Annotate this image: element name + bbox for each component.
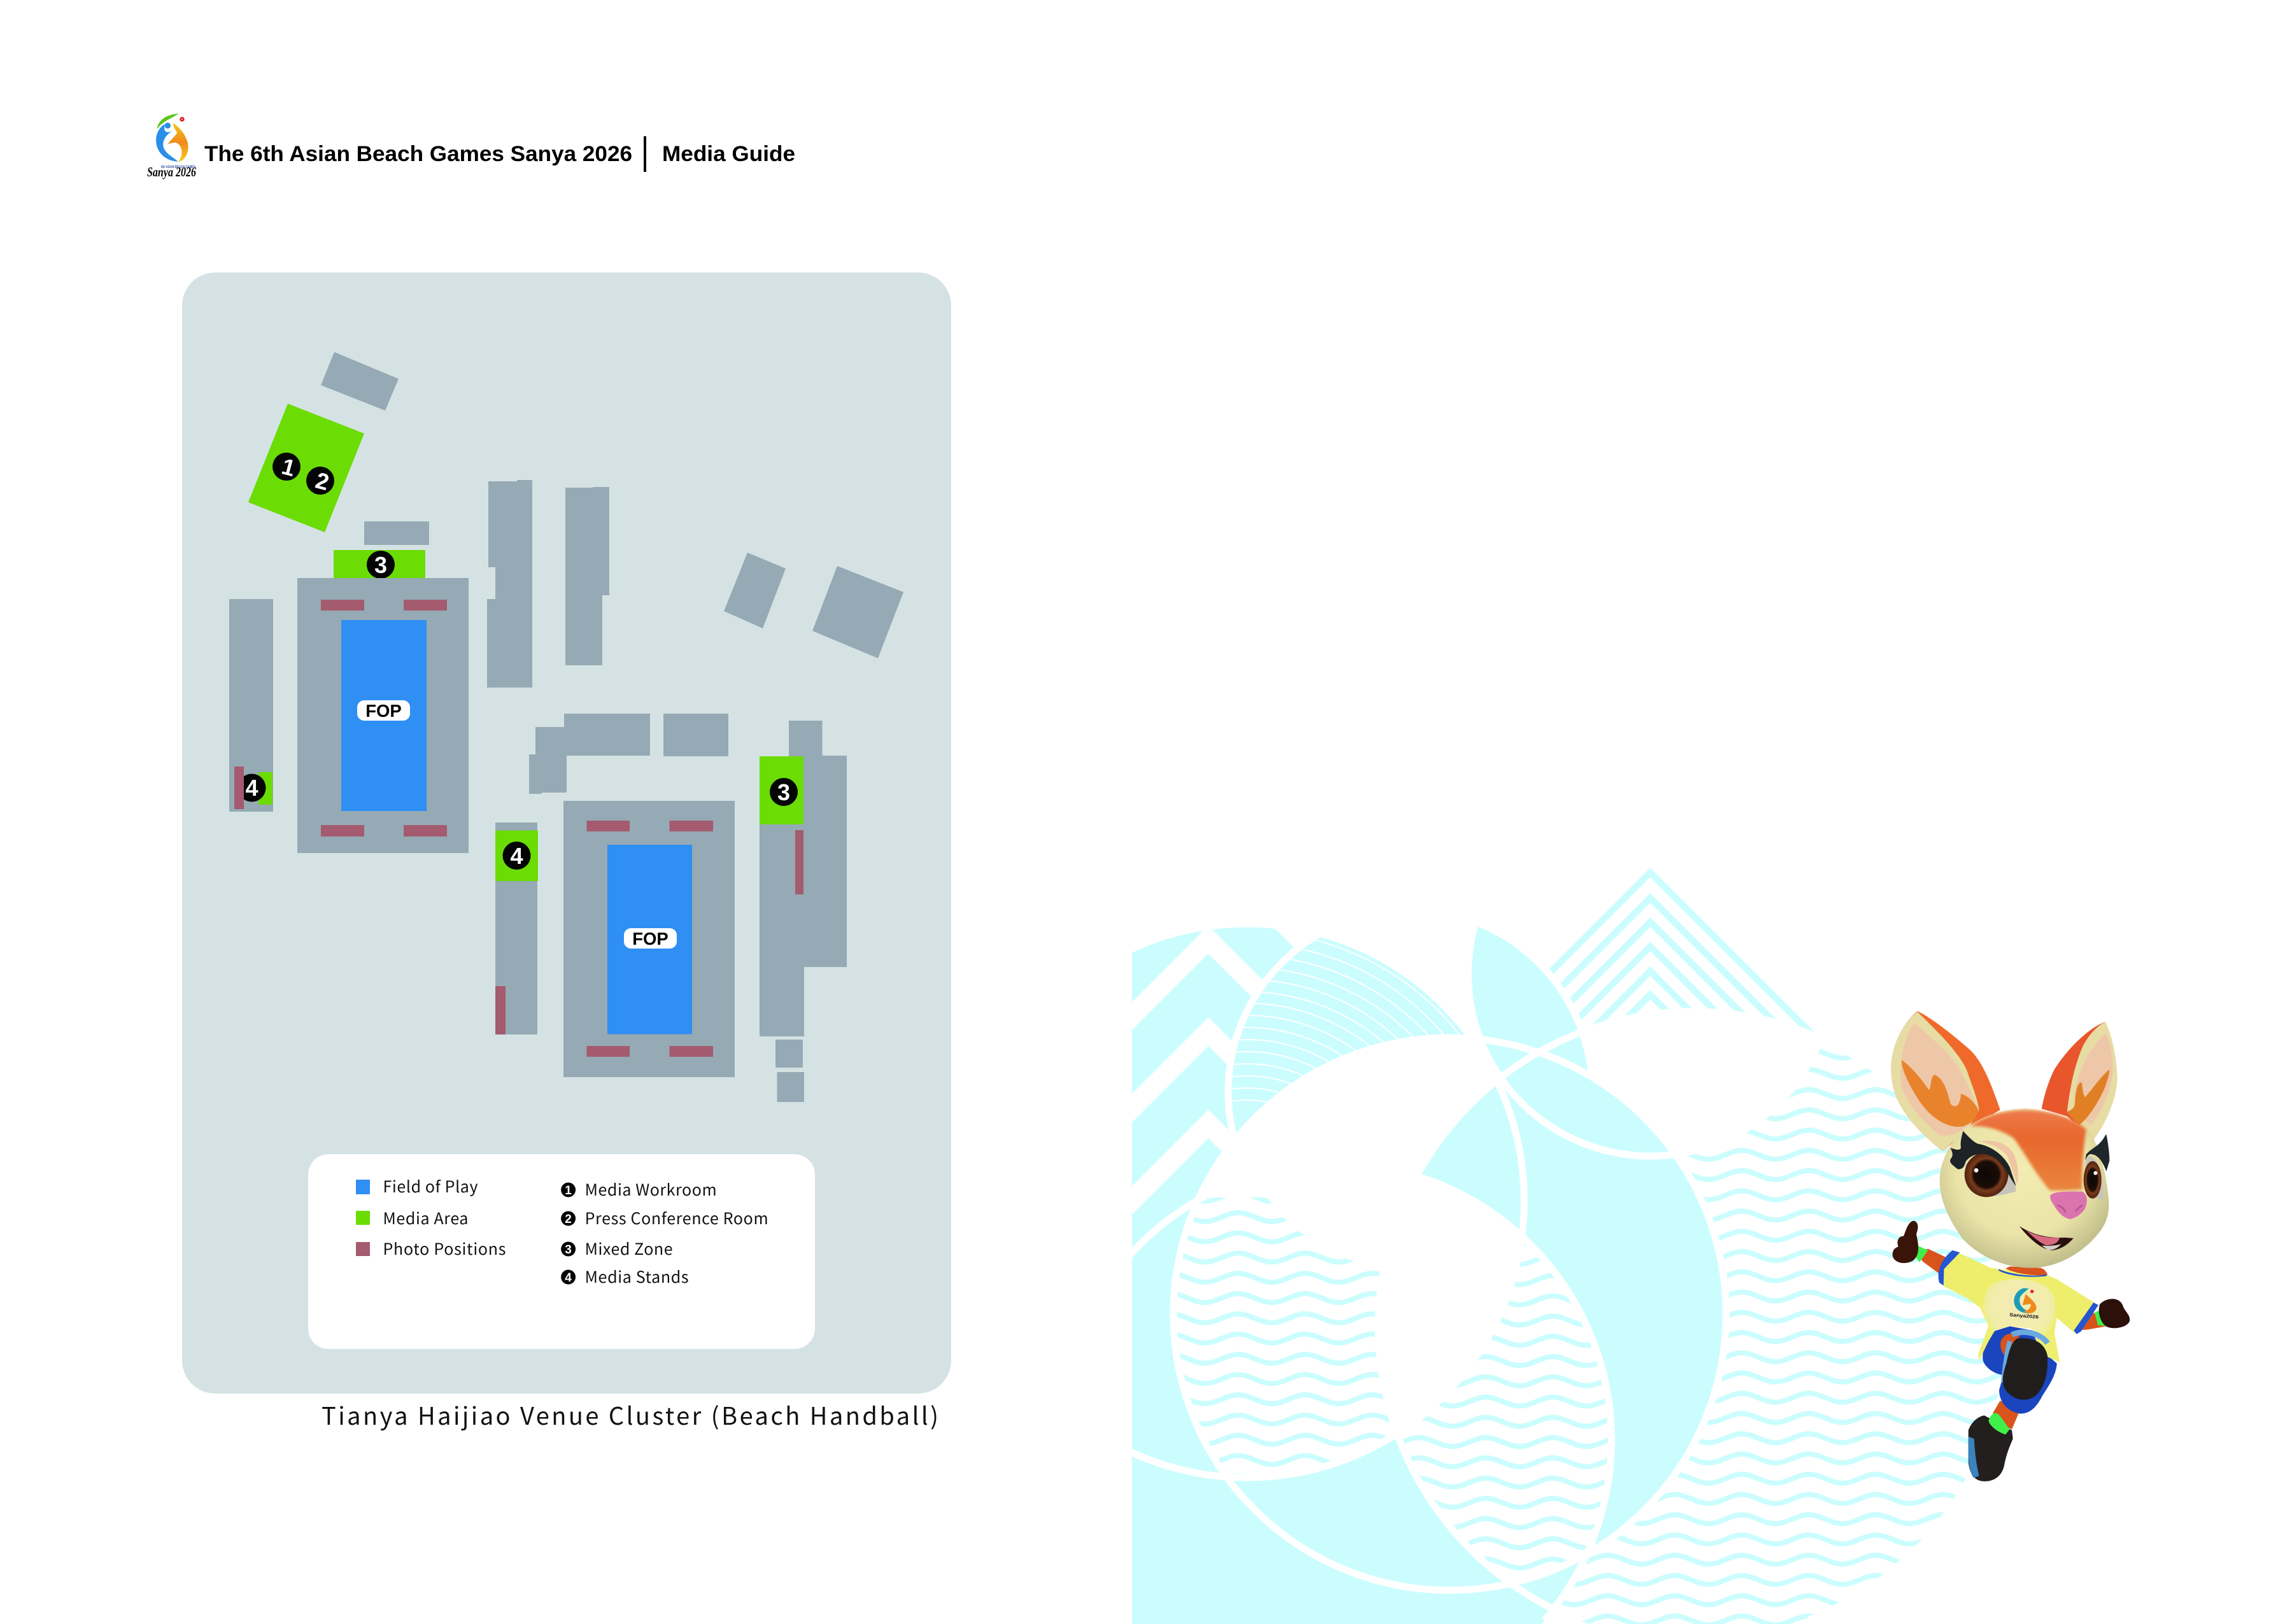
- legend: media stands: Media Stands: [585, 1265, 689, 1288]
- building: north rotated block: [321, 352, 399, 411]
- legend: field of play: Field of Play: [383, 1175, 478, 1197]
- venue B: west media stand: [495, 823, 538, 1034]
- left eye: [1950, 1131, 2016, 1197]
- orange face mask: [1970, 1110, 2086, 1190]
- media area: rotated workroom zone: [248, 404, 364, 532]
- subtitle text: Media Guide: [662, 142, 795, 166]
- shirt logo: [2009, 1288, 2039, 1320]
- icon: games logo: 6th ASIAN BEACH GAMES: [161, 165, 195, 169]
- building: L-shaped block: [529, 714, 650, 794]
- left ear: [1891, 1011, 2000, 1151]
- legend: photo positions: Photo Positions: [383, 1237, 506, 1260]
- shoe: [1969, 1415, 2013, 1481]
- building: stepped block 2: [565, 487, 609, 665]
- building: east large rotated block: [812, 566, 903, 658]
- legend: media stands: 4: [565, 1271, 572, 1285]
- legend: media area: Media Area: [383, 1206, 469, 1229]
- mascot: deer character: [1891, 1011, 2130, 1481]
- venue B: stands and field of play: [563, 801, 735, 1077]
- background decorative pattern: circles, chevrons and waves: [1132, 868, 2130, 1624]
- building: stepped block 1: [487, 480, 532, 688]
- legend: [308, 1154, 815, 1349]
- FOP label B: [624, 928, 677, 949]
- marker 1: [272, 453, 301, 481]
- legend: mixed zone: Mixed Zone: [585, 1237, 673, 1260]
- FOP label A: [357, 700, 410, 721]
- legend: media workroom: Media Workroom: [585, 1178, 717, 1201]
- venue B: east mixed zone and building: 3: [777, 779, 790, 805]
- FOP label A: FOP: [365, 701, 402, 721]
- venue A: stands and field of play: [297, 578, 469, 853]
- media area: mixed zone A: [334, 550, 425, 579]
- legend: press conference room: 2: [565, 1213, 572, 1226]
- building: east small rotated block: [724, 553, 786, 628]
- legend: press conference room: Press Conference Room: [585, 1206, 768, 1229]
- FOP label B: FOP: [632, 929, 669, 949]
- icon: games logo: Sanya 2026: [147, 164, 196, 180]
- knee patch: [2012, 1332, 2048, 1343]
- building: small south blocks: [775, 1040, 804, 1102]
- header: logo and title: [147, 113, 795, 180]
- right ear: [2042, 1022, 2118, 1140]
- media area: mixed zone A: 3: [374, 552, 387, 578]
- panel: venue map: [182, 272, 951, 1394]
- field of play A: [341, 620, 427, 811]
- building: square block: [663, 714, 728, 756]
- mouth: [2020, 1226, 2074, 1250]
- marker 1: 1: [279, 453, 298, 481]
- venue B: east mixed zone and building: [760, 721, 847, 1036]
- title text: The 6th Asian Beach Games Sanya 2026: [204, 142, 632, 166]
- lower leg: [1993, 1401, 2019, 1429]
- cuffs and collar: [1939, 1250, 1960, 1285]
- left arm: [1916, 1249, 1946, 1273]
- venue A: west media stand: 4: [245, 775, 258, 801]
- field of play B: [607, 845, 692, 1034]
- right arm: [2080, 1313, 2106, 1330]
- venue A: west media stand: [229, 599, 273, 812]
- icon: games logo: [147, 113, 196, 180]
- nose: [2050, 1192, 2087, 1219]
- left hand: [1893, 1221, 1918, 1263]
- head: [1940, 1109, 2109, 1268]
- legend: mixed zone: 3: [565, 1243, 572, 1257]
- right eye: [2084, 1134, 2109, 1199]
- marker 2: 2: [313, 467, 332, 495]
- venue B: west media stand: 4: [510, 843, 523, 869]
- shirt logo: Sanya2026: [2009, 1311, 2039, 1320]
- legend: media workroom: 1: [565, 1184, 572, 1197]
- building: small block above mixed zone: [364, 521, 429, 545]
- shorts: [1983, 1326, 2057, 1414]
- marker 2: [306, 467, 334, 495]
- shirt: [1939, 1251, 2095, 1362]
- map caption: Tianya Haijiao Venue Cluster (Beach Handball): [322, 1397, 938, 1432]
